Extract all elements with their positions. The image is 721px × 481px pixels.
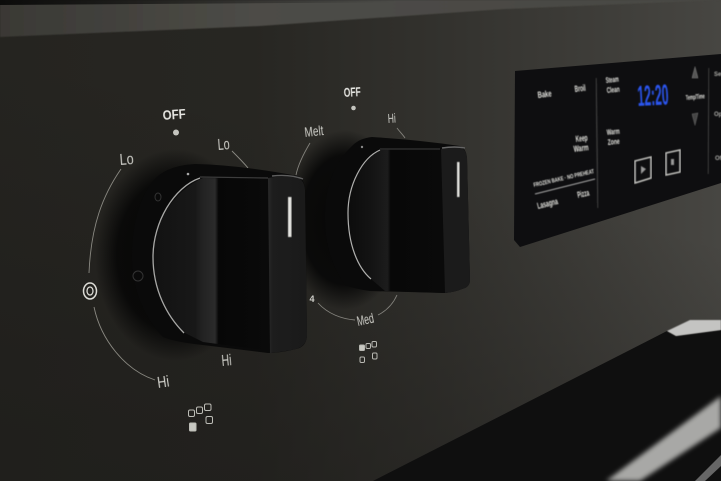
right knob right side xyxy=(441,147,470,293)
right knob base and handle xyxy=(325,137,470,293)
left knob cast shadow xyxy=(95,149,255,361)
button: Warm: Warm xyxy=(573,142,589,154)
panel labels xyxy=(533,75,705,211)
right knob label: Hi: Hi xyxy=(387,111,396,126)
icon: temperature down xyxy=(692,113,698,125)
icon: left burner locator xyxy=(188,404,212,431)
top edge highlight band xyxy=(0,0,721,37)
left knob arc scale xyxy=(89,151,248,380)
far-right labels xyxy=(714,72,721,162)
right knob rim highlight xyxy=(348,150,380,279)
button: Keep: Keep xyxy=(575,133,588,144)
lower black cooktop edge xyxy=(373,320,721,481)
icon: stop button xyxy=(666,150,680,175)
right knob label: OFF: OFF xyxy=(343,85,361,100)
icon: start button xyxy=(635,157,651,183)
button: Broil: Broil xyxy=(574,83,586,94)
display control panel xyxy=(514,54,721,247)
display control panel: 12:20 xyxy=(637,79,669,113)
left knob label: Lo inner: Lo xyxy=(217,136,230,154)
right knob label: Melt: Melt xyxy=(304,123,324,140)
left knob label: Lo outer: Lo xyxy=(119,151,134,169)
left knob right side xyxy=(268,176,307,353)
right knob off dot xyxy=(351,106,356,110)
right knob label: Med: Med xyxy=(356,311,375,329)
label: frozen bake: FROZEN BAKE · NO PREHEAT xyxy=(533,169,595,189)
left knob white indicator xyxy=(288,197,292,237)
left knob group xyxy=(84,85,470,431)
right knob xyxy=(325,137,470,293)
left knob label: Hi outer: Hi xyxy=(156,373,170,392)
left knob rim highlight xyxy=(153,178,200,333)
button: Clean: Clean xyxy=(606,85,620,95)
right knob white indicator xyxy=(457,162,460,197)
button: Bake: Bake xyxy=(537,88,552,100)
left knob off dot xyxy=(173,130,179,136)
frozen bake rule xyxy=(535,179,595,194)
icon: temperature up xyxy=(692,67,698,78)
icon: right burner locator xyxy=(360,342,377,362)
left knob label: OFF: OFF xyxy=(162,105,187,123)
left knob label: Hi inner: Hi xyxy=(221,352,232,370)
button: Steam: Steam xyxy=(605,75,619,85)
left knob base and handle xyxy=(132,164,307,353)
right knob arc scale xyxy=(296,128,405,320)
panel background xyxy=(514,54,721,247)
panel dividers xyxy=(596,78,598,208)
button: Lasagna: Lasagna xyxy=(536,196,559,211)
left knob face xyxy=(153,178,270,351)
button: Warm: Warm xyxy=(606,127,620,137)
left knob xyxy=(132,164,307,353)
left knob ring marks xyxy=(133,193,161,281)
right knob face xyxy=(348,149,447,293)
icon: dual element ring xyxy=(84,283,96,299)
right knob label: 4: 4 xyxy=(309,294,315,304)
button: Pizza: Pizza xyxy=(576,188,591,200)
right knob cast shadow xyxy=(285,130,405,310)
button: Zone: Zone xyxy=(607,137,620,147)
